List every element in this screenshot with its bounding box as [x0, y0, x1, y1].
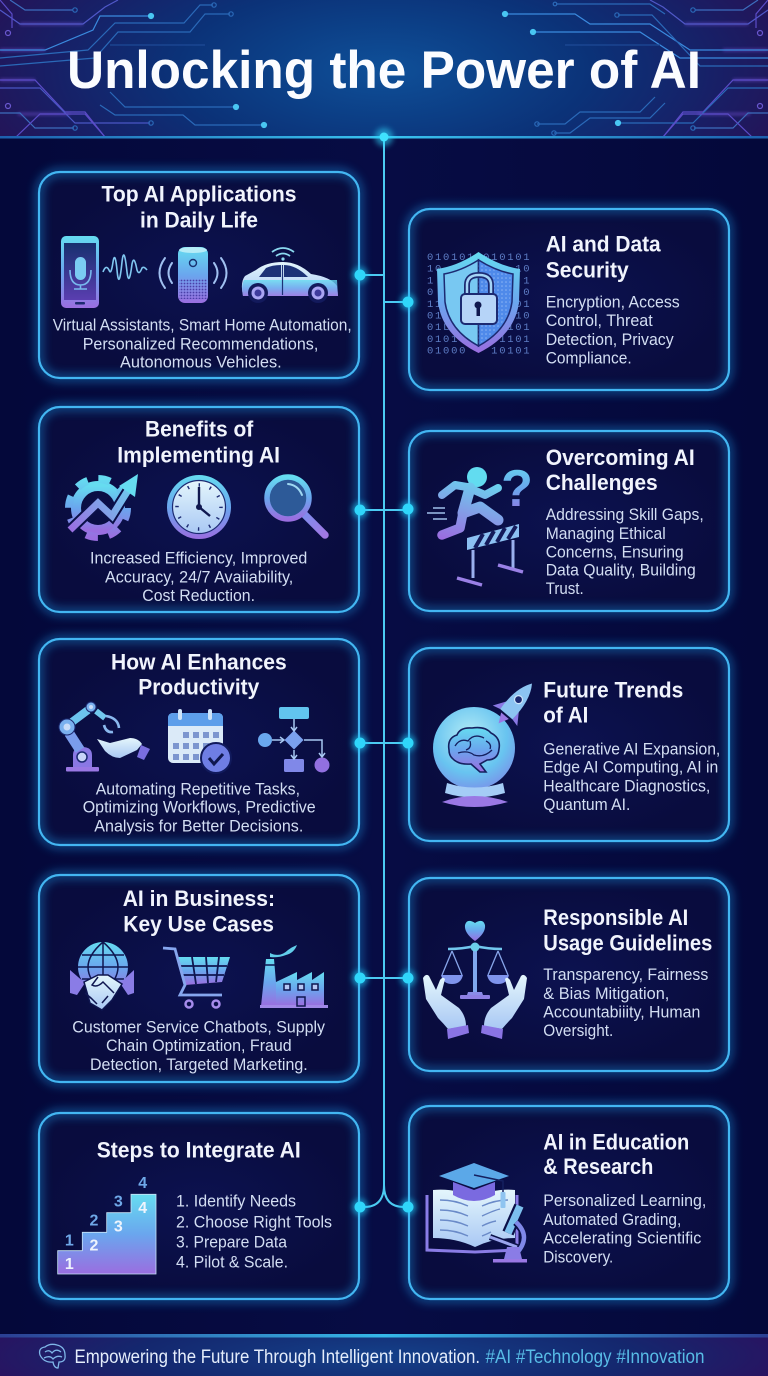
timeline spine and connectors — [360, 128, 408, 1207]
heading: Steps to Integrate AI — [97, 1138, 301, 1163]
icon: microscope — [490, 1206, 527, 1262]
icon: robot arm and hand — [59, 702, 150, 772]
description — [546, 292, 680, 367]
description: Automating Repetitive Tasks, — [96, 779, 300, 798]
icon: shield and binary: 010101 010101 — [427, 252, 531, 264]
icon: globe handshake — [70, 942, 134, 1010]
heading: Overcoming AI — [546, 445, 695, 470]
description: Automated Grading, — [543, 1210, 681, 1229]
description: Detection, Targeted Marketing. — [90, 1055, 308, 1074]
heading: & Research — [543, 1154, 653, 1179]
description: Increased Efficiency, Improved — [90, 548, 307, 567]
icon: workflow diagram — [258, 707, 330, 772]
description: Control, Threat — [546, 311, 653, 330]
icon: clock — [167, 475, 231, 539]
panel: how AI enhances productivity — [39, 639, 359, 845]
heading: Benefits of — [145, 417, 254, 442]
icon: numbered staircase: 2 — [90, 1213, 99, 1230]
description: Managing Ethical — [546, 524, 666, 543]
description: Discovery. — [543, 1247, 613, 1266]
heading: Future Trends — [543, 677, 683, 702]
description: Optimizing Workflows, Predictive — [83, 798, 316, 817]
description: Analysis for Better Decisions. — [94, 817, 303, 836]
icon: shopping cart — [163, 948, 230, 1008]
icon: gear with rising arrow — [69, 474, 138, 537]
title: Unlocking the Power of AI — [67, 41, 701, 100]
description — [90, 548, 307, 605]
heading: Top AI Applications — [102, 182, 296, 207]
description: Accountabiiity, Human — [543, 1003, 700, 1022]
description: Trust. — [546, 579, 584, 598]
panel: overcoming AI challenges — [409, 431, 729, 611]
heading — [543, 677, 683, 728]
heading: AI in Education — [543, 1129, 689, 1154]
description: Transparency, Fairness — [543, 965, 708, 984]
panel: responsible AI usage guidelines — [409, 878, 729, 1071]
heading — [546, 445, 695, 495]
heading — [102, 182, 296, 233]
icon: calendar with check — [168, 709, 231, 773]
icon: shield and binary: 0101 1101 — [427, 334, 531, 346]
panel: AI and data security — [409, 209, 729, 390]
icon: runner jumping hurdle — [427, 460, 533, 585]
heading: Responsible AI — [543, 905, 688, 930]
description: Virtual Assistants, Smart Home Automation, — [53, 316, 352, 335]
icon: numbered staircase: 4 — [138, 1200, 147, 1217]
heading — [117, 417, 280, 467]
steps list: 3. Prepare Data — [176, 1232, 288, 1251]
panel: top AI applications — [39, 172, 359, 378]
icon: numbered staircase — [58, 1175, 156, 1274]
description: Generative AI Expansion, — [543, 739, 720, 758]
description: Detection, Privacy — [546, 330, 674, 349]
heading: Challenges — [546, 470, 658, 495]
icon: connected car — [242, 248, 338, 303]
icon: numbered staircase: 4 — [138, 1175, 147, 1192]
icon: factory — [260, 945, 328, 1008]
heading: Key Use Cases — [123, 912, 274, 937]
icon: crystal ball brain and rocket — [433, 673, 544, 807]
icon: voice wave — [103, 255, 147, 279]
icon: shield and binary: 01 10 — [427, 310, 531, 322]
description: Oversight. — [543, 1021, 613, 1040]
panel: benefits of implementing AI — [39, 407, 359, 612]
icon: shield and binary: 11 01 — [427, 299, 531, 311]
heading: Implementing AI — [117, 442, 280, 467]
footer tagline: Empowering the Future Through Intelligent Innovation. — [74, 1347, 480, 1368]
panel: AI in business — [39, 875, 359, 1082]
steps list: 4. Pilot & Scale. — [176, 1253, 288, 1272]
footer bar — [0, 1334, 768, 1376]
description — [83, 779, 316, 836]
steps list: 1. Identify Needs — [176, 1192, 296, 1211]
header divider line — [0, 136, 768, 138]
icon: shield and binary: 01000 10101 — [427, 346, 531, 358]
icon: shield and binary: 1 1 — [427, 275, 531, 287]
description: Addressing Skill Gaps, — [546, 505, 704, 524]
description: Personalized Learning, — [543, 1191, 706, 1210]
heading — [111, 649, 287, 699]
icon: shield and binary: 01L 101 — [427, 322, 531, 334]
description: Accelerating Scientific — [543, 1228, 702, 1247]
panel: steps to integrate AI — [39, 1113, 359, 1299]
description: Encryption, Access — [546, 292, 680, 311]
icon: numbered staircase: 1 — [65, 1233, 74, 1250]
icon: numbered staircase: 3 — [114, 1194, 123, 1211]
description — [543, 965, 708, 1040]
heading: Productivity — [138, 674, 260, 699]
description — [543, 739, 720, 814]
heading: Usage Guidelines — [543, 931, 712, 956]
description: Chain Optimization, Fraud — [106, 1036, 292, 1055]
heading: Security — [546, 258, 629, 283]
heading: How AI Enhances — [111, 649, 287, 674]
icon: scales, heart and hands — [423, 921, 527, 1039]
connector nodes — [352, 267, 416, 1215]
icon: shield and binary: 10 10 — [427, 264, 531, 276]
icon: phone with microphone — [61, 236, 99, 308]
icon: numbered staircase: 2 — [90, 1238, 99, 1255]
circuit traces right — [502, 0, 768, 137]
heading: AI in Business: — [123, 886, 275, 911]
description: Edge AI Computing, AI in — [543, 758, 718, 777]
icon: runner jumping hurdle: ? — [501, 460, 533, 518]
description — [53, 316, 352, 371]
steps list: 2. Choose Right Tools — [176, 1212, 332, 1231]
icon: numbered staircase: 1 — [65, 1256, 74, 1273]
icon: brain outline — [40, 1344, 65, 1368]
description — [543, 1191, 706, 1266]
heading — [546, 232, 661, 283]
description: Autonomous Vehicles. — [120, 352, 282, 371]
steps list — [176, 1192, 332, 1272]
heading — [543, 905, 712, 956]
purple edge glow lines — [0, 24, 768, 114]
description: & Bias Mitigation, — [543, 984, 669, 1003]
description: Healthcare Diagnostics, — [543, 777, 710, 796]
icon: book, cap and microscope — [427, 1163, 527, 1262]
description: Accuracy, 24/7 Avaiiability, — [105, 567, 293, 586]
description: Personalized Recommendations, — [83, 334, 318, 353]
description: Quantum AI. — [543, 795, 630, 814]
heading: of AI — [543, 703, 588, 728]
description: Concerns, Ensuring — [546, 542, 684, 561]
heading: AI and Data — [546, 232, 661, 257]
panel: AI in education and research — [409, 1106, 729, 1299]
header banner — [0, 0, 768, 137]
description: Data Quality, Building — [546, 561, 696, 580]
icon: numbered staircase: 3 — [114, 1219, 123, 1236]
description: Customer Service Chatbots, Supply — [72, 1017, 325, 1036]
icon: smart speaker — [160, 247, 226, 303]
heading: in Daily Life — [140, 208, 258, 233]
heading — [543, 1129, 689, 1179]
description: Cost Reduction. — [142, 586, 255, 605]
description — [546, 505, 704, 598]
icon: shield and binary — [427, 252, 531, 358]
panel: future trends of AI — [409, 648, 729, 841]
hashtags: #AI #Technology #Innovation — [486, 1347, 704, 1368]
icon: shield and binary: 0 0 — [427, 287, 531, 299]
heading — [123, 886, 275, 937]
description: Compliance. — [546, 348, 632, 367]
description — [72, 1017, 325, 1074]
icon: magnifying glass — [267, 477, 325, 535]
circuit traces left — [0, 0, 266, 137]
